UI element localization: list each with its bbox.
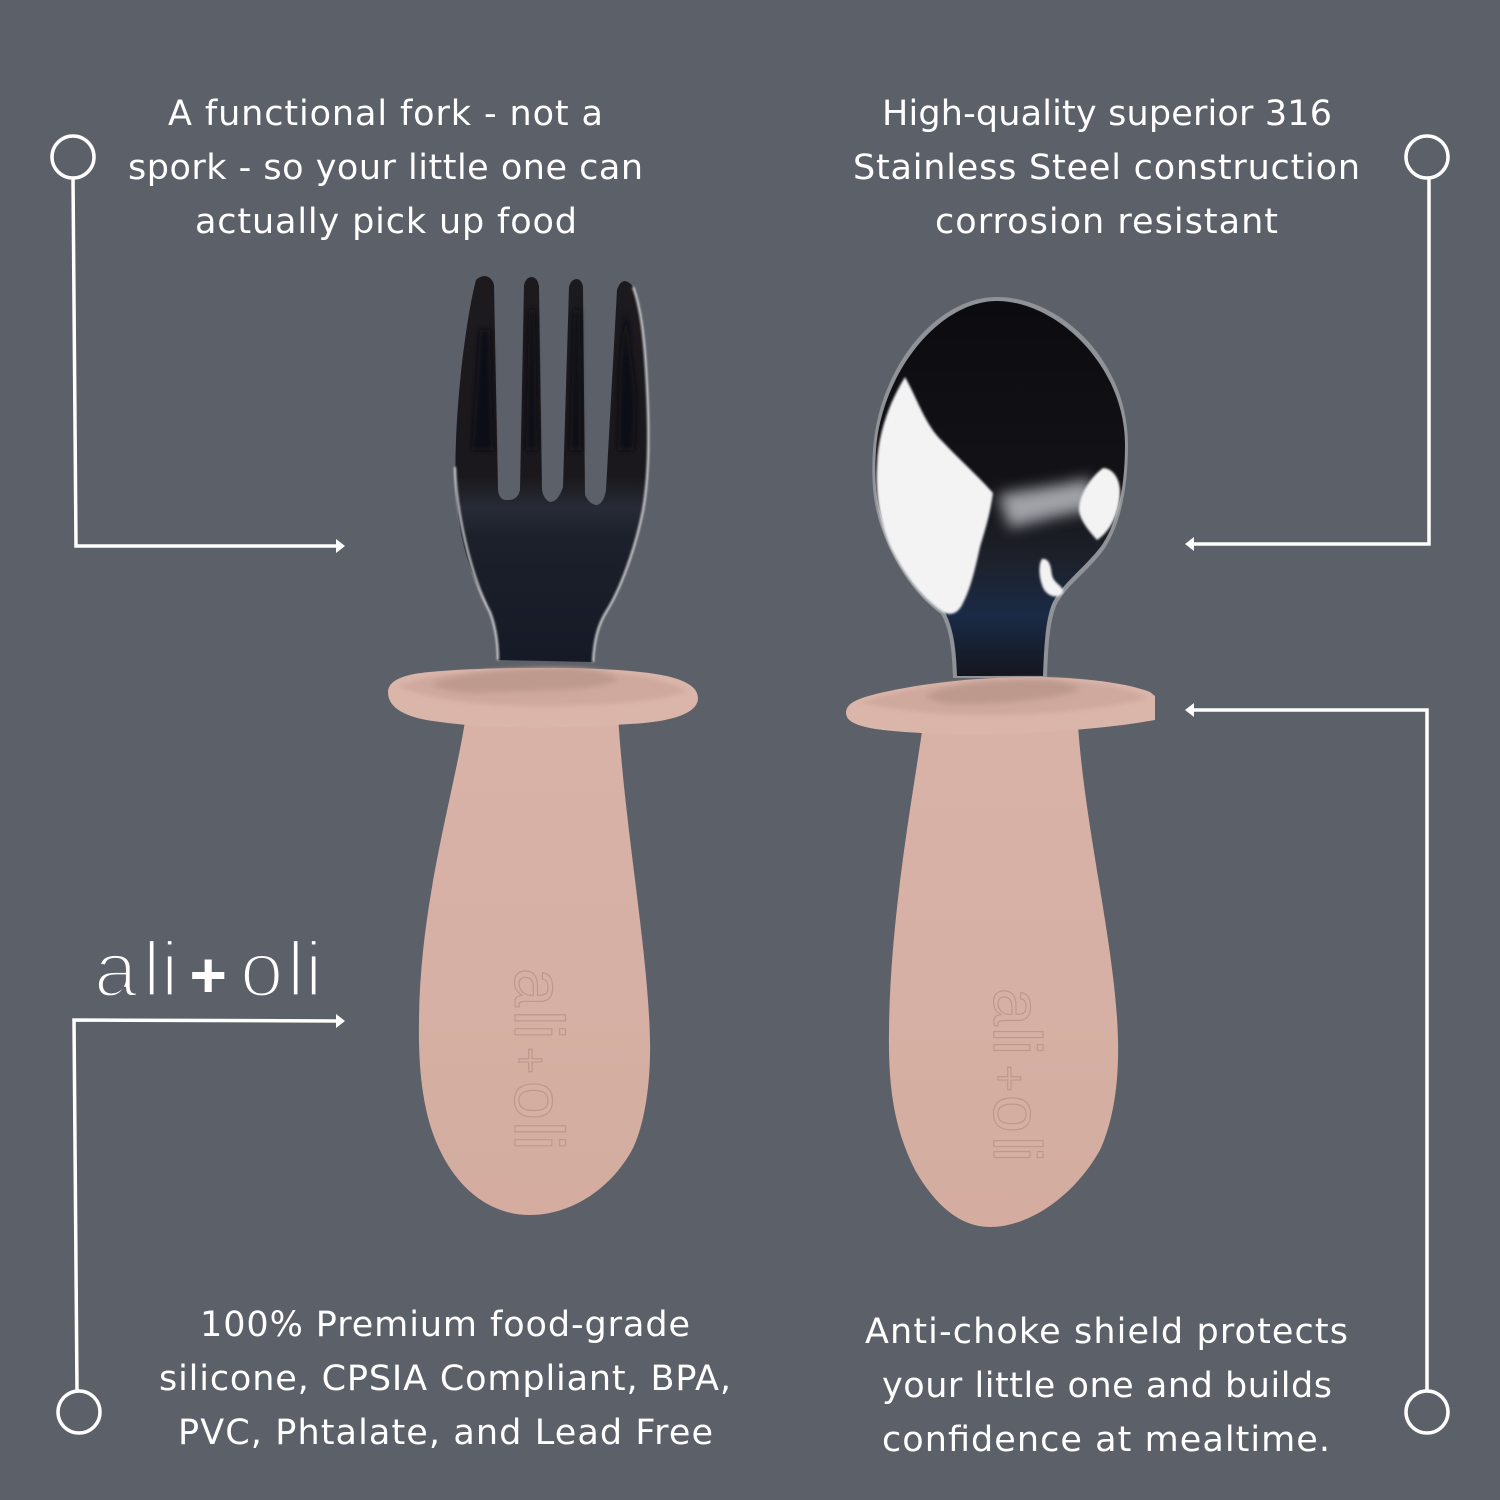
spoon emboss logo: oli bbox=[979, 1095, 1055, 1162]
fork head bbox=[455, 276, 648, 662]
spoon emboss logo: + bbox=[984, 1065, 1036, 1092]
fork bbox=[388, 276, 698, 1215]
text: premium silicone: PVC, Phtalate, and Lead Free bbox=[178, 1413, 713, 1453]
text: functional fork: spork - so your little one can bbox=[128, 148, 643, 188]
spoon emboss logo: ali bbox=[979, 988, 1055, 1055]
text: functional fork: actually pick up food bbox=[195, 202, 577, 242]
spoon shield bbox=[846, 677, 1155, 734]
logo: ali + oli: oli bbox=[240, 925, 322, 1013]
text: premium silicone: 100% Premium food-grade bbox=[200, 1305, 690, 1345]
logo: ali + oli: + bbox=[190, 939, 227, 1011]
callout connector: bottom left bbox=[58, 1014, 345, 1433]
logo: ali + oli: ali bbox=[94, 925, 178, 1013]
text: premium silicone: silicone, CPSIA Compliant, BPA, bbox=[159, 1359, 731, 1399]
fork emboss logo: + bbox=[505, 1047, 557, 1074]
spoon highlights bbox=[877, 377, 1120, 614]
text: premium silicone bbox=[159, 1305, 731, 1453]
text: anti-choke shield bbox=[865, 1312, 1348, 1460]
fork emboss logo: ali bbox=[500, 968, 578, 1040]
spoon reflection band bbox=[998, 478, 1095, 528]
text: stainless steel: High-quality superior 316 bbox=[882, 94, 1332, 134]
callout connector: top left bbox=[52, 136, 345, 553]
spoon bowl bbox=[872, 297, 1128, 678]
text: stainless steel bbox=[853, 94, 1360, 242]
text: anti-choke shield: confidence at mealtime. bbox=[882, 1420, 1330, 1460]
callout connector: bottom right bbox=[1185, 703, 1448, 1433]
fork shield bbox=[388, 668, 698, 728]
logo: ali + oli bbox=[94, 925, 322, 1013]
spoon handle bbox=[889, 725, 1118, 1227]
callout connector: top right bbox=[1185, 136, 1448, 551]
text: anti-choke shield: your little one and builds bbox=[882, 1366, 1332, 1406]
text: stainless steel: Stainless Steel construction bbox=[853, 148, 1360, 188]
fork emboss logo: oli bbox=[500, 1081, 578, 1151]
text: stainless steel: corrosion resistant bbox=[935, 202, 1278, 242]
text: functional fork bbox=[128, 94, 643, 242]
text: functional fork: A functional fork - not a bbox=[168, 94, 603, 134]
fork handle bbox=[419, 715, 650, 1215]
spoon bbox=[846, 297, 1155, 1227]
text: anti-choke shield: Anti-choke shield protects bbox=[865, 1312, 1348, 1352]
